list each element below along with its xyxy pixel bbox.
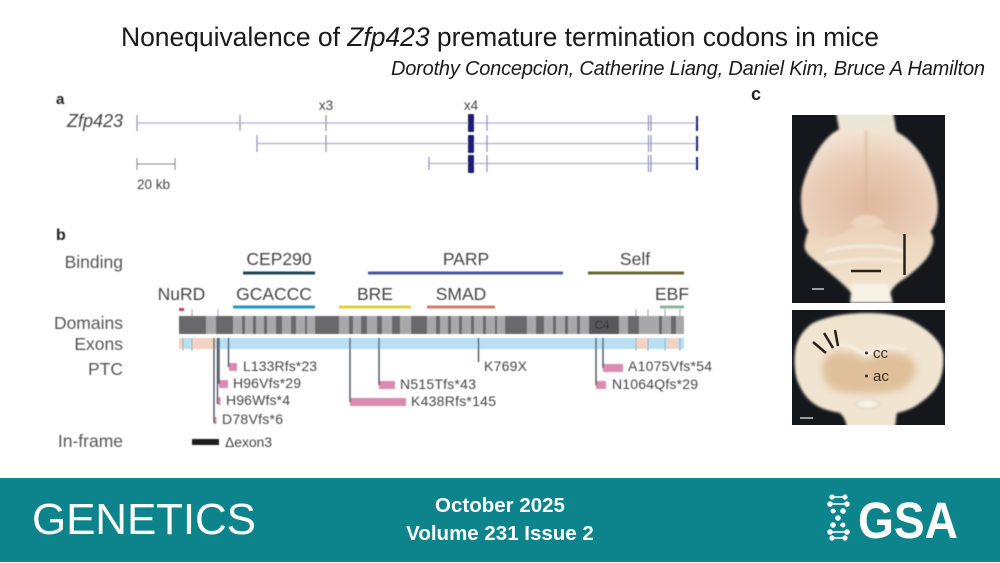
issue information: Volume 231 Issue 2 (406, 522, 594, 545)
PTC labels: D78Vfs*6 (222, 411, 283, 427)
domains bar (179, 316, 684, 334)
PTC labels: N1064Qfs*29 (612, 376, 698, 392)
photo: whole brain (792, 112, 945, 303)
commissure labels (865, 350, 888, 381)
cortical measurement lines (813, 330, 838, 353)
PTC markers (214, 363, 623, 424)
domain labels: SMAD (436, 284, 486, 304)
photo: coronal section (792, 310, 945, 428)
PTC labels: L133Rfs*23 (243, 358, 317, 374)
PTC labels (222, 358, 712, 427)
title: Nonequivalence of Zfp423 premature termination codons in mice (121, 22, 879, 52)
domains bar: C4 (595, 320, 610, 332)
NuRD marker (179, 308, 184, 311)
row labels: In-frame (58, 431, 123, 451)
row labels: Domains (54, 313, 123, 333)
panel label b: b (56, 227, 66, 244)
authors: Dorothy Concepcion, Catherine Liang, Daniel Kim, Bruce A Hamilton (391, 58, 985, 80)
binding lines (233, 273, 684, 307)
row labels (54, 252, 123, 451)
exon labels: x4 (464, 98, 479, 113)
PTC labels: K769X (484, 358, 528, 374)
panel c: brain photos (751, 84, 945, 428)
domain labels (158, 249, 689, 304)
in-frame deletion (192, 434, 272, 450)
row labels: PTC (88, 359, 123, 379)
panel b: protein map (54, 227, 712, 451)
society wordmark: GSA (858, 492, 958, 549)
footer band (0, 478, 1000, 562)
domain labels: Self (620, 249, 650, 269)
commissure labels: cc (873, 345, 888, 362)
issue information (406, 494, 594, 545)
domain labels: NuRD (158, 284, 205, 304)
gene name: Zfp423 (66, 111, 123, 131)
scale bar (812, 288, 824, 290)
scale label: 20 kb (137, 177, 170, 192)
journal name: GENETICS (32, 495, 256, 544)
domain labels: PARP (443, 249, 489, 269)
scale bar (800, 417, 813, 419)
PTC labels: N515Tfs*43 (400, 376, 476, 392)
domain labels: BRE (357, 284, 393, 304)
exon labels (319, 98, 479, 113)
panel a: gene structure (56, 91, 698, 192)
exons bar (179, 309, 684, 351)
PTC labels: H96Vfs*29 (233, 375, 301, 391)
large exons (468, 114, 698, 173)
domain labels: CEP290 (246, 249, 312, 269)
commissure labels: ac (873, 368, 889, 385)
PTC labels: K438Rfs*145 (411, 393, 496, 409)
row labels: Exons (74, 334, 123, 354)
domain labels: GCACCC (236, 284, 312, 304)
striatum tan region (822, 352, 916, 394)
transcript rows (137, 123, 697, 164)
row labels: Binding (65, 252, 123, 272)
anatomical measurement lines (851, 234, 904, 275)
PTC labels: A1075Vfs*54 (628, 358, 712, 374)
exon ticks (137, 115, 651, 172)
icon: DNA helix (827, 494, 850, 541)
PTC lines (214, 338, 603, 423)
scale bar (137, 158, 175, 170)
PTC labels: H96Wfs*4 (226, 392, 290, 408)
panel label c: c (751, 84, 761, 104)
panel label a: a (56, 91, 65, 108)
domain labels: EBF (655, 284, 689, 304)
exon labels: x3 (319, 98, 333, 113)
issue information: October 2025 (435, 494, 565, 517)
in-frame deletion: Δexon3 (225, 434, 272, 450)
